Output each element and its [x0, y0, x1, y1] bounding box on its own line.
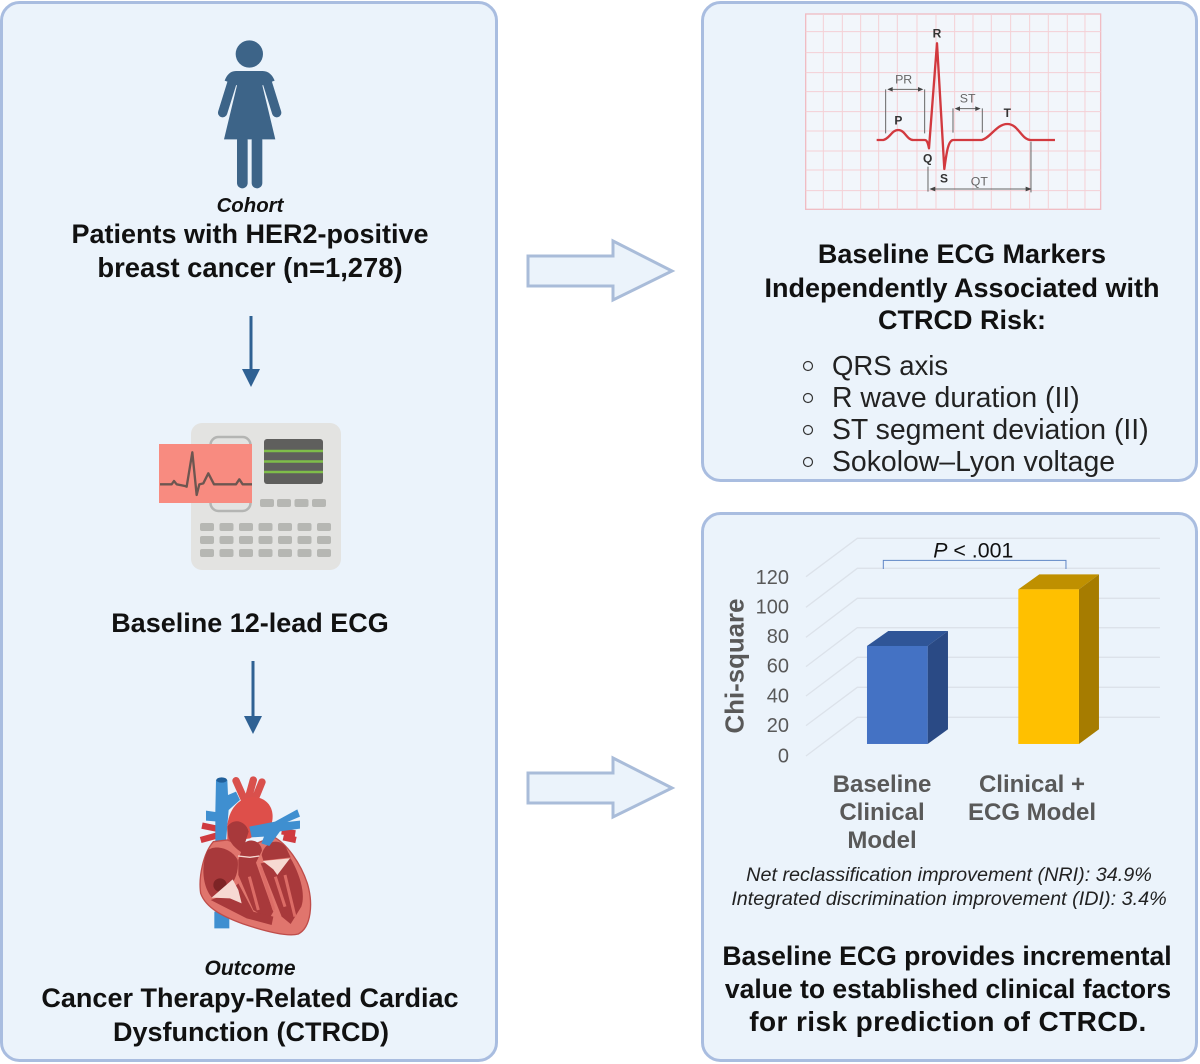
ECG waveform diagram: QT [971, 174, 988, 188]
x label: clinical + ECG model: ECG Model [968, 799, 1096, 826]
bar chart: chi-square: Chi-square [722, 599, 750, 733]
icon: heart [200, 777, 311, 935]
conclusion: Baseline ECG provides incremental [722, 941, 1172, 971]
bar chart: chi-square: 100 [756, 596, 789, 618]
panel: study flow [2, 2, 496, 1060]
arrow: cohort to ECG markers [528, 241, 672, 300]
ECG waveform diagram: P [894, 113, 902, 127]
outcome description: Cancer Therapy-Related Cardiac [41, 983, 459, 1013]
marker list [804, 350, 1149, 478]
arrow: ECG to outcome [244, 661, 262, 734]
x label: clinical + ECG model: Clinical + [979, 771, 1085, 798]
bar chart: chi-square [722, 538, 1160, 767]
panel: ECG markers [702, 2, 1196, 480]
ECG waveform diagram: Q [923, 151, 932, 165]
x label: baseline clinical model: Model [847, 827, 917, 854]
cohort description: Patients with HER2-positive [71, 219, 429, 249]
arrow: to model comparison [528, 758, 672, 817]
ECG waveform diagram [806, 14, 1101, 209]
bar chart: chi-square: 0 [778, 745, 789, 767]
ECG waveform diagram: T [1004, 106, 1012, 120]
conclusion: for risk prediction of CTRCD. [749, 1006, 1147, 1037]
ECG waveform diagram: S [940, 171, 948, 185]
cohort label: Cohort [217, 195, 285, 217]
x label: baseline clinical model: Clinical [839, 799, 925, 826]
bar chart: chi-square: 40 [767, 685, 789, 707]
outcome description: Dysfunction (CTRCD) [113, 1017, 389, 1047]
panel: model comparison [702, 514, 1196, 1060]
conclusion: value to established clinical factors [725, 974, 1171, 1004]
bar chart: chi-square: 60 [767, 656, 789, 678]
arrow: cohort to ECG [242, 316, 260, 387]
heading: baseline ECG markers: Independently Associated with [764, 273, 1160, 303]
bar chart: chi-square: 80 [767, 626, 789, 648]
outcome label: Outcome [204, 957, 296, 980]
ECG waveform diagram: R [933, 27, 942, 41]
ECG waveform diagram: ST [960, 92, 976, 106]
ECG step label: Baseline 12-lead ECG [111, 608, 389, 638]
marker list: Sokolow–Lyon voltage [832, 446, 1115, 478]
reclassification statistics: Integrated discrimination improvement (IDI): 3.4% [731, 888, 1167, 910]
cohort description: breast cancer (n=1,278) [97, 252, 403, 283]
x label: baseline clinical model: Baseline [833, 771, 931, 798]
ECG waveform diagram: PR [895, 72, 912, 86]
marker list: R wave duration (II) [832, 382, 1080, 414]
bar chart: chi-square: P < .001 [933, 539, 1013, 563]
marker list: QRS axis [832, 350, 948, 381]
icon: ECG machine [159, 423, 341, 570]
marker list: ST segment deviation (II) [832, 414, 1149, 446]
bar chart: chi-square: 20 [767, 715, 789, 737]
bar chart: chi-square: 120 [756, 567, 789, 589]
reclassification statistics: Net reclassification improvement (NRI): 34.9% [746, 864, 1152, 886]
heading: baseline ECG markers: CTRCD Risk: [878, 305, 1046, 335]
heading: baseline ECG markers: Baseline ECG Markers [818, 239, 1106, 269]
icon: woman patient [223, 40, 277, 188]
